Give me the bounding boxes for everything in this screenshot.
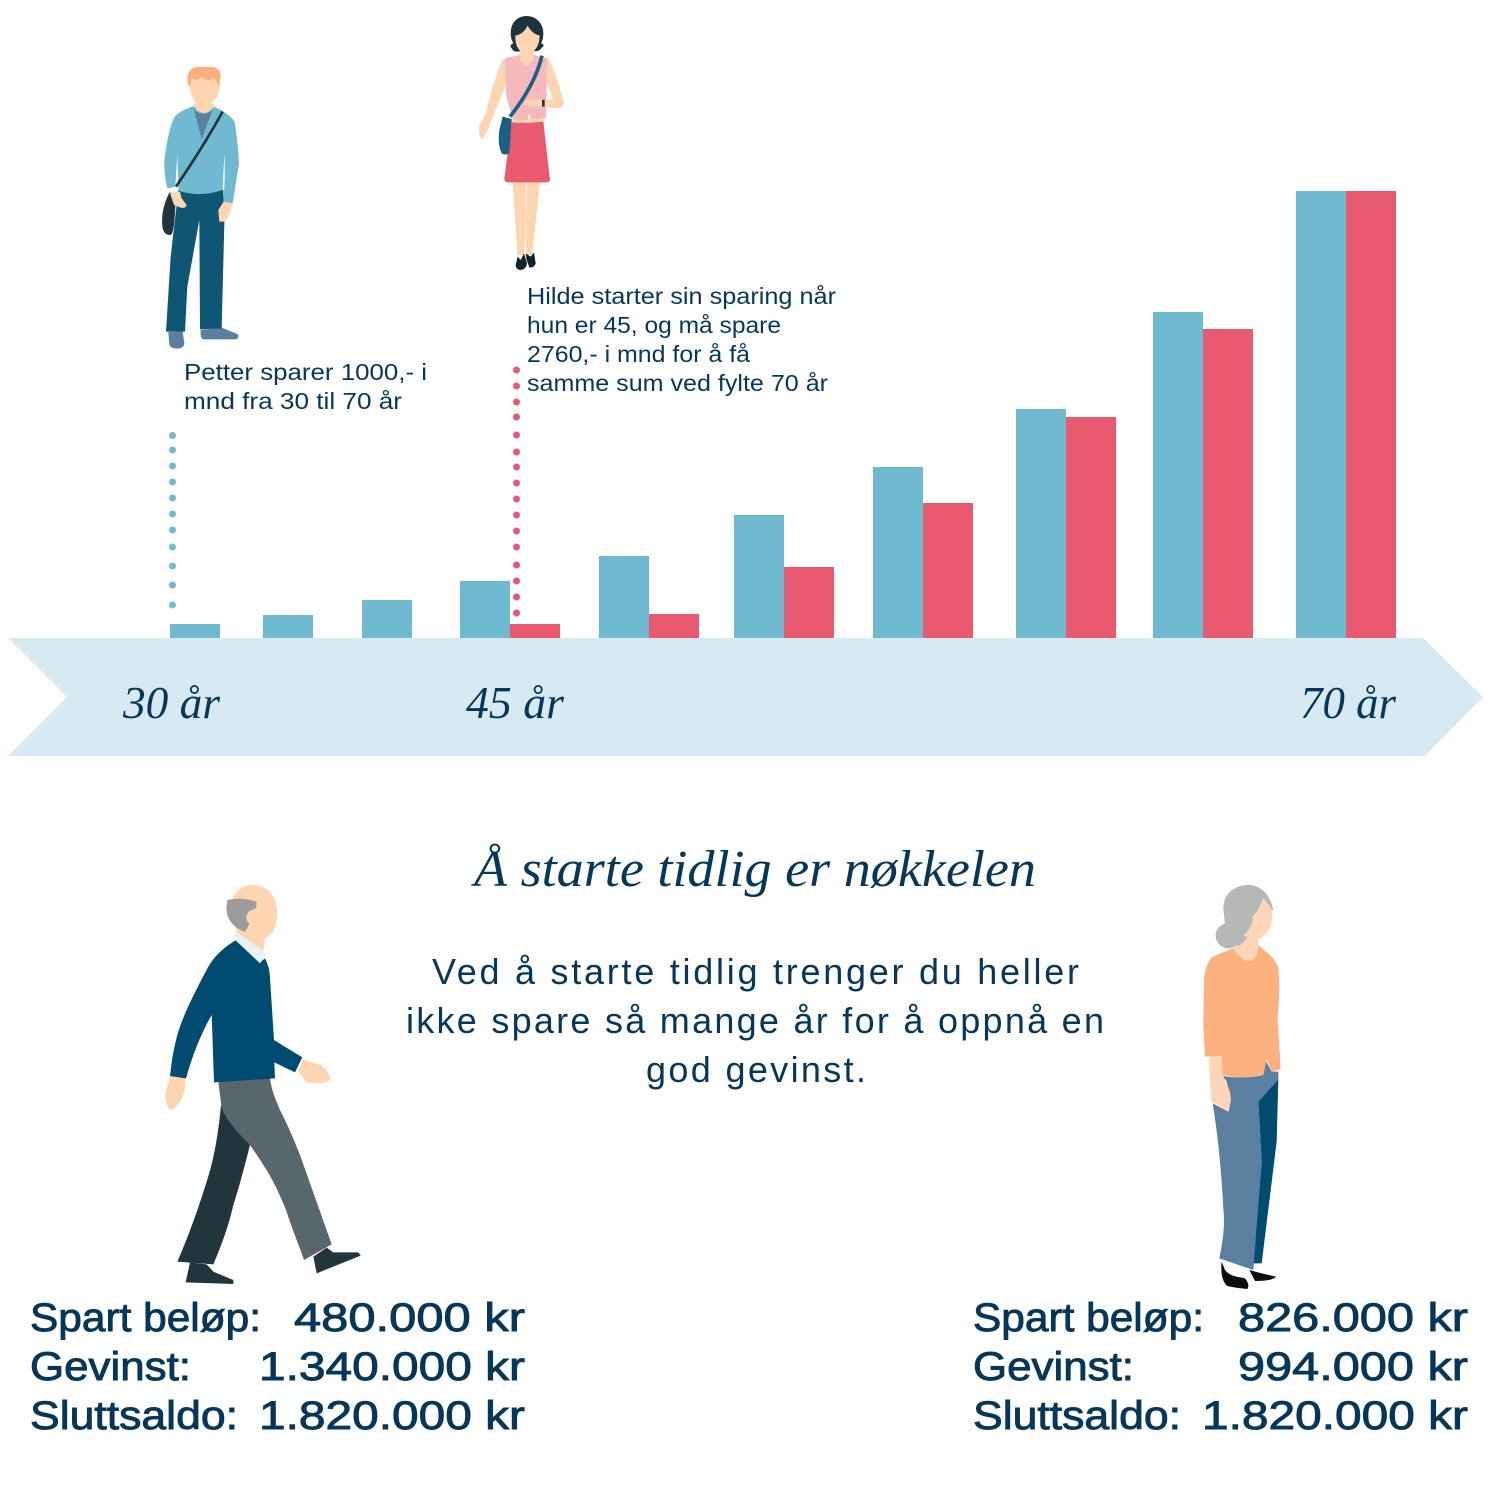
figure: old woman standing (1203, 885, 1281, 1289)
stats: Hilde: 994.000 kr (1238, 1345, 1468, 1389)
text: Petter: mnd fra 30 til 70 år (184, 388, 402, 414)
figure: Petter young man (162, 67, 239, 349)
text: Hilde: hun er 45, og må spare (527, 312, 781, 338)
timeline arrow (8, 638, 1483, 756)
stats: Petter: Sluttsaldo: (30, 1394, 238, 1438)
stats: Petter: Gevinst: (30, 1345, 191, 1389)
axis label: 45 år: 45 år (466, 678, 564, 728)
text: Petter (184, 359, 427, 414)
stats: Hilde: 826.000 kr (1238, 1296, 1468, 1340)
text: Hilde: samme sum ved fylte 70 år (527, 370, 828, 396)
text: Hilde (527, 283, 836, 396)
axis label: 30 år: 30 år (122, 678, 220, 728)
stats: Petter: 1.820.000 kr (259, 1394, 525, 1438)
figure: old man walking (165, 885, 361, 1284)
text: Hilde: Hilde starter sin sparing når (527, 283, 836, 309)
heading: Å starte tidlig er nøkkelen (471, 841, 1036, 898)
stats: Petter (30, 1296, 525, 1438)
body text: god gevinst. (646, 1049, 866, 1090)
dotted line: Hilde start (513, 366, 520, 616)
body text (406, 951, 1104, 1090)
body text: Ved å starte tidlig trenger du heller (432, 951, 1079, 992)
axis label: 70 år: 70 år (1300, 678, 1396, 728)
stats: Hilde: 1.820.000 kr (1202, 1394, 1468, 1438)
body text: ikke spare så mange år for å oppnå en (406, 1000, 1104, 1041)
stats: Hilde: Spart beløp: (973, 1296, 1204, 1340)
stats: Petter: Spart beløp: (30, 1296, 261, 1340)
stats: Hilde: Gevinst: (973, 1345, 1134, 1389)
stats: Hilde (973, 1296, 1468, 1438)
text: Hilde: 2760,- i mnd for å få (527, 341, 750, 367)
stats: Petter: 1.340.000 kr (259, 1345, 525, 1389)
stats: Petter: 480.000 kr (294, 1296, 525, 1340)
text: Petter: Petter sparer 1000,- i (184, 359, 427, 385)
figure: Hilde young woman (479, 16, 564, 270)
dotted line: Petter start (169, 432, 176, 608)
stats: Hilde: Sluttsaldo: (973, 1394, 1181, 1438)
bar chart: savings by age (170, 191, 1396, 638)
